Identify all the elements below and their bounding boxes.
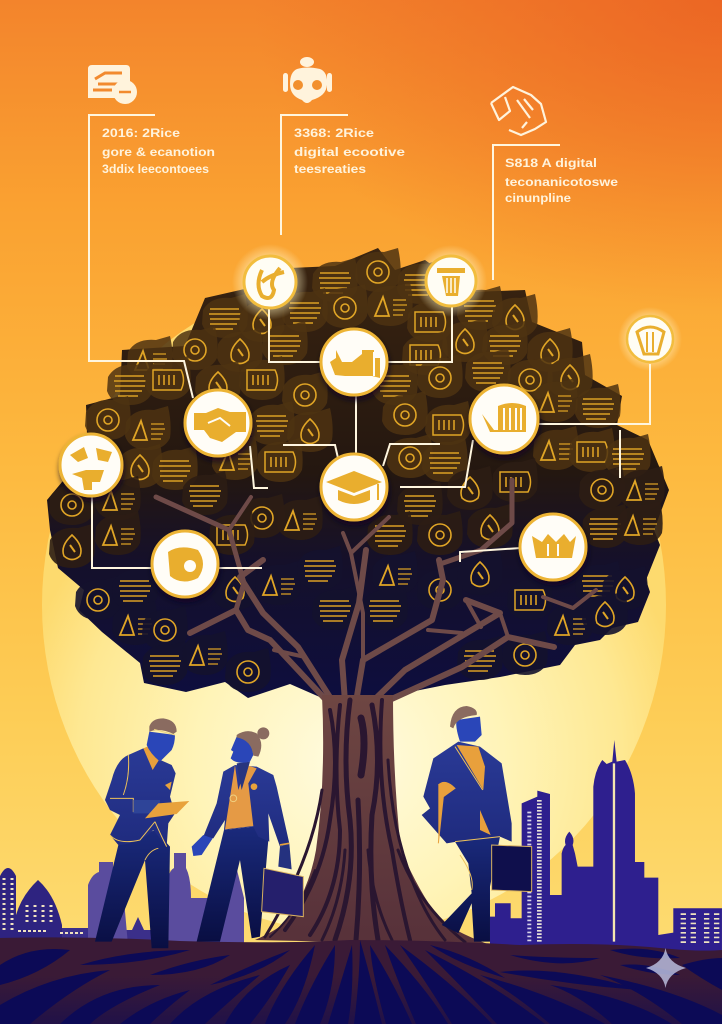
text block 2: 3368: 2Rice	[294, 126, 374, 140]
skyline left	[0, 853, 244, 945]
badge: column glow	[415, 245, 487, 317]
ground and roots	[0, 937, 722, 1024]
text block 3: cinunpline	[505, 191, 571, 205]
text block 3	[505, 156, 618, 205]
sparkle watermark	[646, 948, 686, 988]
text block 2: teesreaties	[294, 162, 366, 176]
top icon: robot head	[283, 57, 332, 103]
text block 1: 3ddix leecontoees	[102, 162, 209, 176]
briefcase	[262, 868, 303, 917]
badge: crown basket	[520, 514, 586, 580]
badge: handshake	[185, 390, 251, 456]
tree branches	[156, 480, 596, 702]
tree canopy	[47, 248, 669, 698]
badge: scroll circle	[152, 531, 218, 597]
text block 2	[294, 126, 405, 176]
badge: building cake	[470, 385, 538, 453]
folder	[145, 801, 189, 818]
top icon: handshake outline	[491, 87, 546, 135]
text block 3: S818 A digital	[505, 156, 597, 170]
badge: scroll glow	[232, 244, 308, 320]
person: man walking with briefcase	[422, 706, 532, 942]
badge: map pieces	[60, 434, 122, 496]
canopy leaves lower	[75, 546, 648, 692]
badge: far right glow	[618, 307, 682, 371]
text block 1	[102, 126, 215, 176]
text block 2: digital ecootive	[294, 145, 405, 159]
top icon: monitor with badge	[88, 65, 137, 104]
person: man with folder	[95, 718, 189, 948]
canopy leaves middle	[49, 458, 665, 568]
tree trunk	[255, 695, 490, 945]
text block 3: teconanicotoswe	[505, 175, 618, 189]
canopy leaves upper	[85, 248, 651, 490]
skyline right	[490, 740, 722, 957]
connector lines	[89, 115, 650, 568]
sun disc	[42, 277, 666, 933]
text block 1: gore & ecanotion	[102, 145, 215, 159]
badge: graduation cap	[321, 454, 387, 520]
briefcase	[492, 845, 532, 892]
text block 1: 2016: 2Rice	[102, 126, 180, 140]
badge: factory	[321, 329, 387, 395]
person: woman with briefcase	[192, 727, 303, 942]
